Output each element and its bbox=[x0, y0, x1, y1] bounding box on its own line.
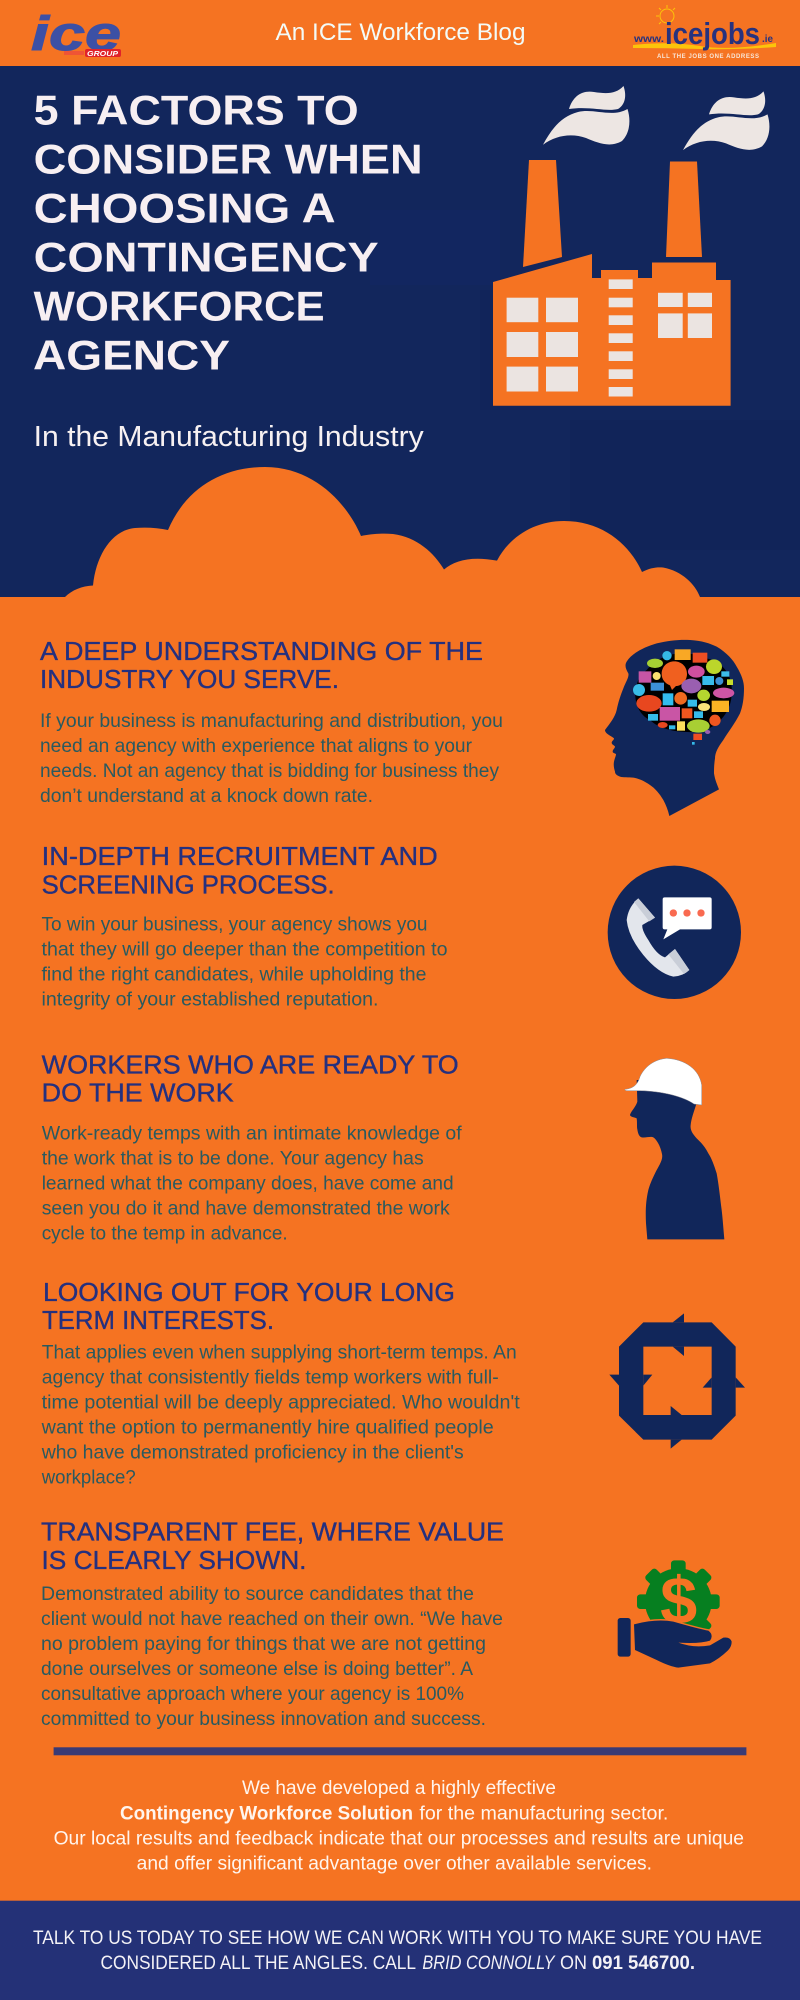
closing statement: We have developed a highly effective bbox=[242, 1778, 556, 1799]
panel: factor 1 bbox=[40, 638, 744, 816]
logo: ICE Group: ice bbox=[31, 8, 121, 61]
title: CONTINGENCY bbox=[34, 233, 379, 280]
icon: head with speech bubbles bbox=[605, 640, 744, 816]
body text: That applies even when supplying short-term temps. An bbox=[42, 1341, 517, 1363]
header title: An ICE Workforce Blog bbox=[276, 19, 526, 46]
body text: seen you do it and have demonstrated the work bbox=[42, 1197, 450, 1219]
panel: factor 2 bbox=[42, 843, 741, 1011]
heading bbox=[42, 843, 438, 899]
icon: phone and speech bubble bbox=[608, 866, 741, 999]
body text: find the right candidates, while upholding the bbox=[42, 964, 426, 986]
body text: Work-ready temps with an intimate knowledge of bbox=[42, 1122, 462, 1144]
heading: LOOKING OUT FOR YOUR LONG bbox=[43, 1279, 455, 1307]
logo: icejobs: ALL THE JOBS ONE ADDRESS bbox=[657, 54, 759, 60]
body text: committed to your business innovation and success. bbox=[41, 1708, 486, 1730]
heading: TRANSPARENT FEE, WHERE VALUE bbox=[41, 1519, 504, 1547]
heading: TERM INTERESTS. bbox=[42, 1307, 274, 1335]
closing statement: for the manufacturing sector. bbox=[419, 1803, 668, 1824]
body text bbox=[41, 1583, 503, 1730]
body text: Demonstrated ability to source candidates that the bbox=[41, 1583, 474, 1605]
heading: DO THE WORK bbox=[42, 1080, 234, 1108]
heading: IN-DEPTH RECRUITMENT AND bbox=[42, 843, 438, 871]
heading: SCREENING PROCESS. bbox=[42, 871, 335, 899]
footer call to action bbox=[0, 1901, 800, 2000]
icon: hand holding dollar gear: $ bbox=[660, 1564, 697, 1638]
logo: ICE Group: GROUP bbox=[87, 49, 119, 58]
closing statement: Contingency Workforce Solution bbox=[120, 1803, 413, 1824]
body text: consultative approach where your agency is 100% bbox=[41, 1683, 464, 1705]
heading: INDUSTRY YOU SERVE. bbox=[40, 666, 339, 694]
smoke: left chimney bbox=[543, 86, 629, 145]
smoke: right chimney bbox=[683, 91, 769, 150]
heading bbox=[42, 1051, 459, 1108]
footer call to action: CONSIDERED ALL THE ANGLES. CALL bbox=[100, 1953, 416, 1974]
footer call to action: 091 546700. bbox=[592, 1953, 695, 1974]
body text: who have demonstrated proficiency in the client's bbox=[41, 1441, 464, 1463]
body text: agency that consistently fields temp workers with full- bbox=[42, 1366, 499, 1388]
heading: WORKERS WHO ARE READY TO bbox=[42, 1051, 459, 1079]
subtitle: In the Manufacturing Industry bbox=[34, 421, 424, 453]
body text: no problem paying for things that we are not getting bbox=[41, 1633, 486, 1655]
icon: factory bbox=[493, 86, 769, 406]
panel: factor 5 bbox=[41, 1519, 732, 1730]
footer call to action: ON bbox=[560, 1953, 587, 1974]
heading: IS CLEARLY SHOWN. bbox=[42, 1547, 306, 1575]
body text: If your business is manufacturing and distribution, you bbox=[40, 710, 503, 732]
body text: workplace? bbox=[41, 1466, 136, 1488]
body text: time potential will be deeply appreciated. Who wouldn't bbox=[42, 1391, 520, 1413]
panel: factor 3 bbox=[42, 1051, 724, 1244]
logo: icejobs: www. bbox=[633, 34, 664, 45]
body text bbox=[41, 1341, 520, 1488]
panel: top header bar bbox=[0, 0, 800, 66]
body text: that they will go deeper than the competition to bbox=[42, 939, 448, 961]
body text bbox=[42, 1122, 462, 1244]
closing statement: and offer significant advantage over other available services. bbox=[137, 1853, 652, 1874]
footer call to action: BRID CONNOLLY bbox=[422, 1953, 556, 1974]
body text: done ourselves or someone else is doing better”. A bbox=[41, 1658, 473, 1680]
body text: cycle to the temp in advance. bbox=[42, 1222, 288, 1244]
closing statement bbox=[54, 1778, 744, 1874]
body text: want the option to permanently hire qualified people bbox=[41, 1416, 494, 1438]
body text bbox=[42, 914, 448, 1011]
title: CONSIDER WHEN bbox=[34, 135, 423, 182]
body text: don’t understand at a knock down rate. bbox=[40, 785, 373, 807]
body text: To win your business, your agency shows you bbox=[42, 914, 428, 936]
body text: client would not have reached on their own. “We have bbox=[41, 1608, 503, 1630]
body text: learned what the company does, have come and bbox=[42, 1172, 454, 1194]
title: AGENCY bbox=[33, 331, 230, 378]
body text: the work that is to be done. Your agency has bbox=[42, 1147, 424, 1169]
logo: icejobs bbox=[633, 5, 776, 60]
logo: icejobs: .ie bbox=[762, 34, 773, 45]
title: CHOOSING A bbox=[34, 184, 336, 231]
title: WORKFORCE bbox=[34, 282, 325, 329]
body text: integrity of your established reputation. bbox=[42, 989, 378, 1011]
cloud divider bbox=[65, 467, 700, 597]
logo: icejobs: icejobs bbox=[665, 16, 760, 51]
icon: worker in hard hat bbox=[625, 1058, 724, 1239]
heading bbox=[40, 638, 483, 694]
body text: need an agency with experience that aligns to your bbox=[40, 735, 472, 757]
heading bbox=[41, 1519, 504, 1575]
icon: hand holding dollar gear bbox=[618, 1560, 732, 1668]
closing statement: Our local results and feedback indicate that our processes and results are unique bbox=[54, 1828, 744, 1849]
title bbox=[33, 86, 423, 378]
heading: A DEEP UNDERSTANDING OF THE bbox=[40, 638, 483, 666]
icon: octagonal cycle arrows bbox=[609, 1313, 745, 1449]
heading bbox=[42, 1279, 455, 1335]
body text bbox=[40, 710, 503, 807]
title: 5 FACTORS TO bbox=[34, 86, 359, 133]
body text: needs. Not an agency that is bidding for business they bbox=[40, 760, 499, 782]
divider bar bbox=[54, 1747, 746, 1755]
panel: factor 4 bbox=[41, 1279, 745, 1488]
panel: hero background bbox=[0, 66, 800, 597]
